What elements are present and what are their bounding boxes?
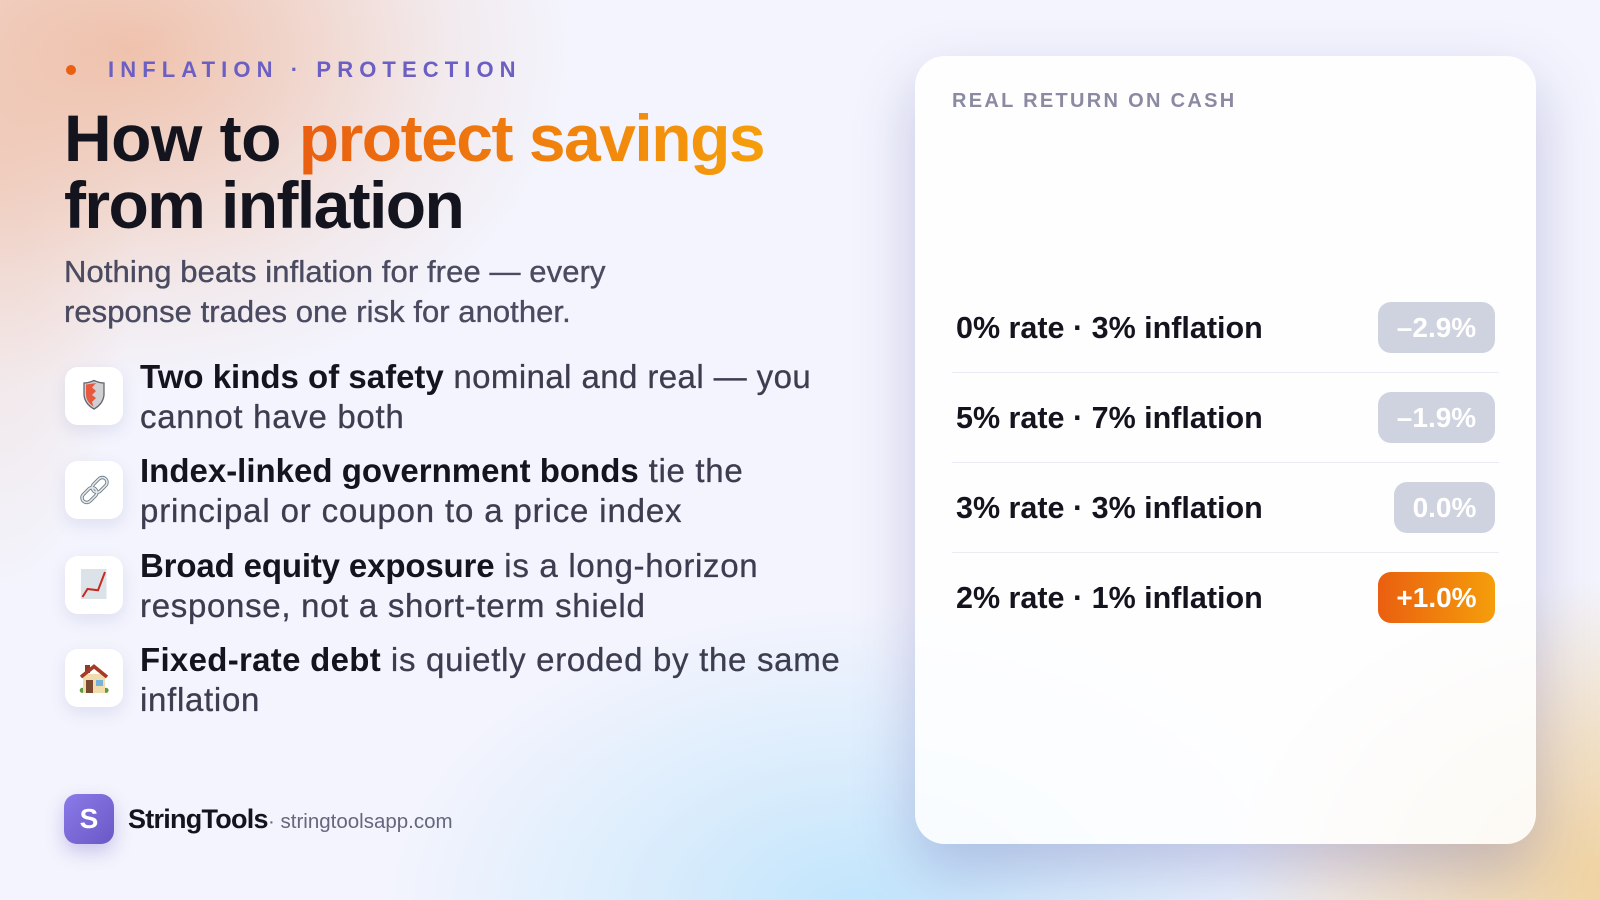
footer brand bbox=[56, 794, 453, 860]
row: 2% rate: 2% rate · 1% inflation bbox=[956, 581, 1263, 615]
icon: chart bbox=[65, 556, 123, 614]
logo bbox=[64, 794, 114, 844]
logo: S bbox=[80, 803, 98, 834]
bullet 4: fixed-rate debt: inflation bbox=[140, 681, 260, 718]
badge bbox=[1378, 392, 1495, 443]
badge: +1.0% bbox=[1396, 582, 1477, 613]
title: from inflation bbox=[64, 168, 463, 242]
bullet 4: fixed-rate debt bbox=[63, 641, 840, 718]
badge: –1.9% bbox=[1397, 402, 1476, 433]
subtitle: Nothing beats inflation for free — every bbox=[64, 254, 606, 289]
row: 5% rate bbox=[956, 392, 1495, 443]
text: Broad equity exposure is a long-horizon bbox=[140, 547, 758, 584]
icon: shield bbox=[65, 367, 123, 425]
row: 3% rate bbox=[956, 482, 1495, 533]
badge: 0.0% bbox=[1413, 492, 1476, 523]
eyebrow: category label: INFLATION · PROTECTION bbox=[108, 57, 522, 82]
subtitle: response trades one risk for another. bbox=[64, 294, 571, 329]
row: 5% rate: 5% rate · 7% inflation bbox=[956, 401, 1263, 435]
row: 0% rate: 0% rate · 3% inflation bbox=[956, 311, 1263, 345]
row: 3% rate: 3% rate · 3% inflation bbox=[956, 491, 1263, 525]
row: 2% rate bbox=[956, 572, 1495, 623]
text: Two kinds of safety nominal and real — you bbox=[140, 358, 811, 395]
badge bbox=[1378, 302, 1495, 353]
title bbox=[64, 101, 764, 242]
text: Index-linked government bonds tie the bbox=[140, 452, 743, 489]
badge bbox=[1394, 482, 1495, 533]
badge bbox=[1378, 572, 1495, 623]
panel heading: REAL RETURN ON CASH bbox=[952, 90, 1236, 112]
bullet 2: index-linked bonds bbox=[63, 452, 743, 530]
title: How to protect savings bbox=[64, 101, 764, 175]
bullet 1: two kinds of safety bbox=[63, 358, 811, 435]
text: Fixed-rate debt is quietly eroded by the same bbox=[140, 641, 840, 678]
panel: real return on cash bbox=[915, 56, 1536, 844]
bullet 3: broad equity: response, not a short-term shield bbox=[140, 587, 646, 624]
brand name: StringTools bbox=[128, 804, 268, 834]
bullet 1: two kinds of safety: cannot have both bbox=[140, 398, 404, 435]
row: 0% rate bbox=[956, 302, 1495, 353]
url: · stringtoolsapp.com bbox=[268, 810, 453, 833]
icon: house bbox=[65, 649, 123, 707]
icon: link bbox=[65, 461, 123, 519]
bullet 2: index-linked bonds: principal or coupon to a price index bbox=[140, 492, 682, 529]
bullet 3: broad equity bbox=[63, 547, 758, 624]
subtitle bbox=[64, 254, 606, 329]
badge: –2.9% bbox=[1397, 312, 1476, 343]
